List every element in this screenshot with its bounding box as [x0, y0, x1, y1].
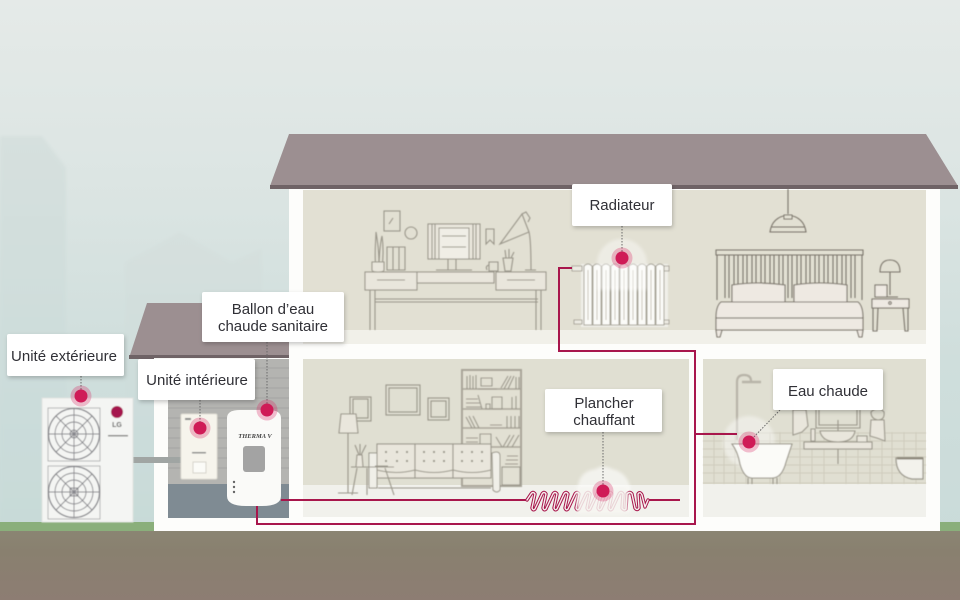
- LG logo: LG: [112, 422, 122, 429]
- background city silhouettes: [0, 136, 262, 530]
- marker: hot water: [738, 432, 760, 452]
- office desk scene: [365, 211, 546, 330]
- side table and vase: [351, 444, 394, 495]
- bathtub: [732, 444, 792, 484]
- label: Eau chaude: [749, 369, 883, 442]
- main roof: [270, 134, 958, 189]
- towel, mirror, sink: [793, 408, 885, 464]
- lower fan: [48, 466, 100, 519]
- annex room: [168, 359, 289, 518]
- label: Unité extérieure: Unité extérieure: [11, 348, 117, 365]
- label: Ballon d'eau chaude sanitaire: Ballon d’eau: [232, 301, 314, 318]
- marker: water tank: [256, 400, 278, 420]
- lower right room: [703, 359, 926, 517]
- indoor unit: [181, 414, 217, 479]
- label: Plancher chauffant: [545, 389, 662, 491]
- label: Plancher chauffant: chauffant: [573, 412, 636, 429]
- marker: outdoor unit: [70, 386, 92, 406]
- label: Radiateur: [572, 184, 672, 258]
- label: Unité intérieure: Unité intérieure: [146, 372, 248, 389]
- wall frames: [350, 385, 449, 421]
- bookcase: [462, 370, 521, 486]
- floor lamp: [338, 414, 358, 493]
- outdoor unit: [42, 398, 133, 522]
- water tank: [227, 410, 281, 506]
- water tank: THERMA V: [238, 433, 272, 440]
- indoor annex equipment pipe: [133, 457, 181, 463]
- lower left room: [303, 359, 689, 517]
- upper fan: [48, 408, 100, 461]
- label: Ballon d'eau chaude sanitaire: [202, 292, 344, 410]
- bathroom scene: [703, 375, 926, 484]
- desk: [365, 272, 546, 330]
- shower: [737, 375, 761, 440]
- label: Plancher chauffant: Plancher: [574, 395, 634, 412]
- living room scene: [338, 370, 521, 495]
- label: Radiateur: Radiateur: [589, 197, 655, 214]
- tiles: [703, 432, 926, 484]
- monitor: [428, 224, 480, 270]
- marker: underfloor heating: [592, 480, 614, 502]
- toilet: [896, 457, 923, 479]
- plant and binders: [372, 232, 405, 272]
- underfloor heating coil: [527, 487, 648, 514]
- ceiling lamp: [770, 189, 806, 232]
- marker: radiator: [612, 248, 632, 268]
- house walls: [154, 186, 940, 531]
- sofa: [369, 444, 500, 492]
- label: Unité extérieure: [7, 334, 124, 396]
- bookcase lower cabinet: [502, 467, 520, 485]
- bed: [716, 250, 863, 337]
- heating pipes: [257, 268, 737, 524]
- label: Unité intérieure: [138, 359, 255, 428]
- radiator: [572, 264, 669, 327]
- marker: indoor unit: [190, 418, 210, 438]
- ground: [0, 522, 960, 600]
- annex roof: [129, 303, 290, 359]
- label: Eau chaude: Eau chaude: [788, 383, 868, 400]
- wall frame and clock: [384, 211, 417, 239]
- desk lamp, cup and pencils: [486, 212, 536, 271]
- nightstand and lamp: [872, 260, 909, 331]
- white glows behind markers: [578, 239, 775, 512]
- label: Ballon d'eau chaude sanitaire: chaude sanitaire: [218, 318, 328, 335]
- upper room: [303, 190, 926, 344]
